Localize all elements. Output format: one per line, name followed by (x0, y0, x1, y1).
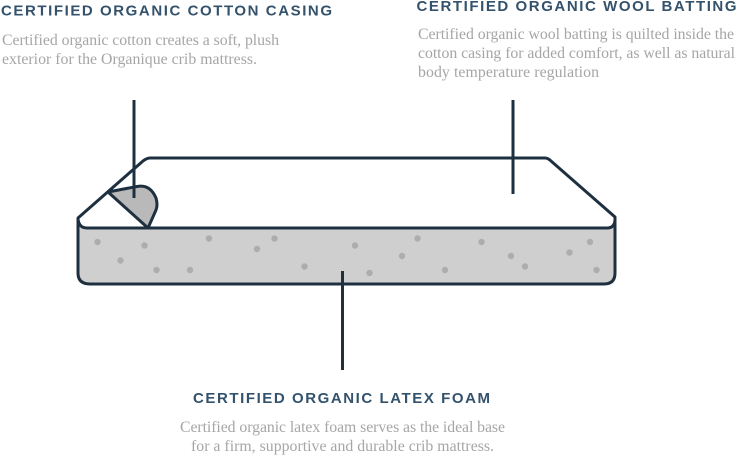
text block: wool batting description (418, 26, 736, 81)
leader line: cotton casing (132, 100, 136, 198)
text block: wool batting description: Certified organic wool batting is quilted inside the (418, 26, 734, 43)
text block: wool batting description: body temperature regulation (418, 64, 599, 81)
text block: cotton casing description (2, 32, 279, 68)
heading: cotton casing: CERTIFIED ORGANIC COTTON CASING (1, 2, 332, 20)
leader line: wool batting (512, 100, 514, 194)
mattress outline (78, 158, 615, 284)
text block: cotton casing description: exterior for the Organique crib mattress. (2, 51, 257, 68)
latex foam layer (78, 219, 615, 284)
text block: latex foam description: Certified organic latex foam serves as the ideal base (180, 419, 505, 436)
text block: latex foam description (180, 419, 505, 455)
folded corner: cotton layer (108, 186, 157, 228)
leader line: latex foam (341, 271, 344, 370)
latex foam speckles (94, 235, 600, 276)
text block: latex foam description: for a firm, supportive and durable crib mattress. (191, 438, 494, 455)
text block: cotton casing description: Certified organic cotton creates a soft, plush (2, 32, 279, 49)
text block: wool batting description: cotton casing for added comfort, as well as natural (418, 45, 736, 62)
mattress illustration (78, 158, 615, 284)
heading: latex foam: CERTIFIED ORGANIC LATEX FOAM (193, 390, 490, 407)
